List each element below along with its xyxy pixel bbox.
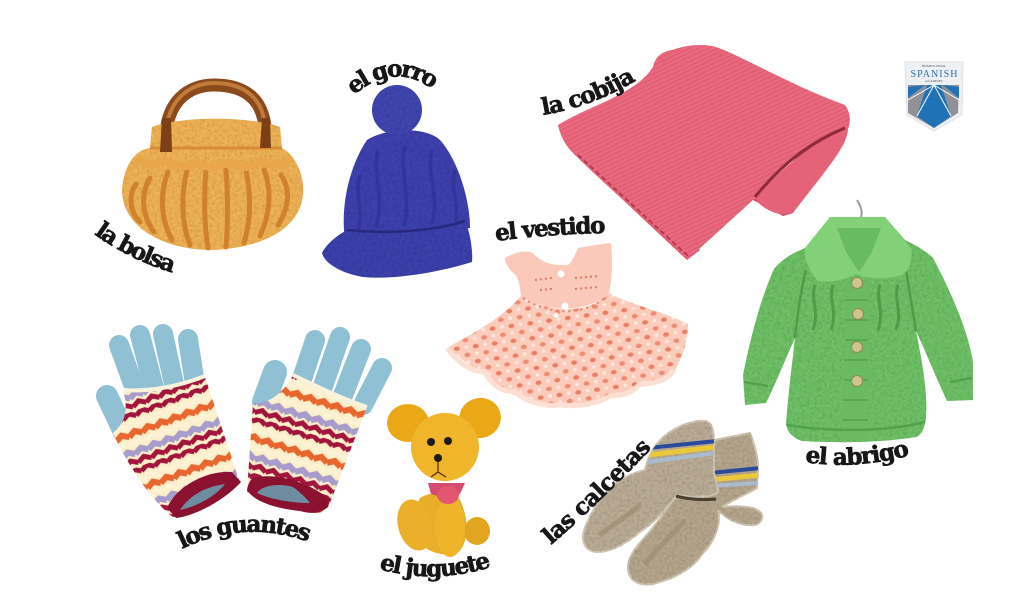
item: wool socks xyxy=(583,421,762,584)
item: pink blanket xyxy=(558,45,850,260)
coat sleeve shading xyxy=(795,268,916,338)
handle ends xyxy=(160,118,271,152)
label: el juguete: el juguete xyxy=(380,554,490,582)
label: la cobija: la cobija xyxy=(540,72,636,116)
dog ears xyxy=(387,404,429,442)
right glove hand xyxy=(247,375,367,513)
dress eyelets xyxy=(523,296,607,311)
hat crown xyxy=(344,130,470,240)
dog legs xyxy=(392,495,438,555)
coat buttons xyxy=(852,278,864,386)
dress skirt xyxy=(447,293,688,406)
dress buttons xyxy=(554,270,568,318)
coat placket xyxy=(842,282,870,440)
left glove band xyxy=(124,376,205,390)
hat cuff xyxy=(322,221,472,278)
label: el vestido: el vestido xyxy=(496,216,605,241)
item: pink lace dress xyxy=(447,243,688,406)
back sock stripes xyxy=(710,468,760,486)
coat cables xyxy=(813,285,899,330)
bag ruffle xyxy=(136,158,292,167)
blanket top xyxy=(558,45,850,260)
right glove band xyxy=(293,375,367,407)
coat collar xyxy=(805,217,911,282)
left glove opening xyxy=(167,472,241,518)
logo top line: HOMESCHOOL xyxy=(922,64,946,68)
logo shield xyxy=(905,62,963,131)
label: el abrigo: el abrigo xyxy=(806,444,908,466)
bag ribs xyxy=(131,170,287,248)
right glove opening xyxy=(247,476,330,513)
dog tag xyxy=(437,486,459,504)
bag handle xyxy=(166,85,265,148)
blanket fold lip xyxy=(755,128,848,215)
coat neck opening xyxy=(837,228,881,272)
bag body xyxy=(122,119,303,250)
item: yellow toy dog xyxy=(387,392,507,557)
item: bag xyxy=(122,83,303,250)
dress scalloped hem xyxy=(447,348,674,406)
left glove fingers xyxy=(107,334,195,432)
dog body xyxy=(414,493,467,554)
coat hem and cuffs xyxy=(787,422,925,430)
label: el gorro: el gorro xyxy=(349,64,436,92)
label: las calcetas: las calcetas xyxy=(540,440,650,545)
blanket underside xyxy=(753,125,848,216)
label: los guantes: los guantes xyxy=(175,518,311,549)
dress bodice xyxy=(505,243,612,308)
logo bottom line: ACADEMY xyxy=(925,79,943,83)
logo wordmark: SPANISH xyxy=(910,69,958,80)
hat cables xyxy=(358,145,456,232)
front sock stripes xyxy=(648,441,716,462)
dog mouth xyxy=(431,462,446,477)
logo burst xyxy=(908,85,959,128)
item: striped gloves xyxy=(107,334,382,518)
dog collar xyxy=(428,483,465,499)
sock folded cuff shadow xyxy=(676,496,716,500)
logo: Homeschool Spanish Academy xyxy=(905,62,963,131)
back sock xyxy=(628,433,762,584)
blanket seam xyxy=(578,155,688,256)
right glove fingers xyxy=(264,337,382,405)
coat body and sleeves xyxy=(743,217,973,442)
label: la bolsa: la bolsa xyxy=(94,220,174,273)
hat pompom xyxy=(372,85,422,135)
item: green coat xyxy=(743,200,973,442)
item: knitted hat xyxy=(322,85,472,278)
front sock xyxy=(583,421,718,552)
left glove hand xyxy=(113,377,240,517)
dog head xyxy=(411,413,479,481)
dog eyes and nose xyxy=(427,437,452,462)
coat hanger xyxy=(838,200,878,232)
